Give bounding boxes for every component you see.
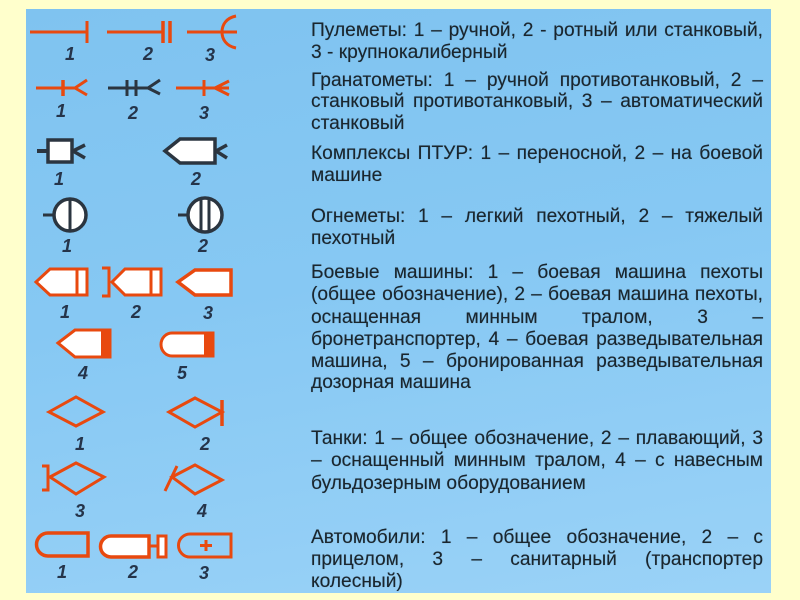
icon: combat vehicle 4: 4 [77, 363, 88, 383]
text: automobiles [310, 527, 763, 592]
icon: flamethrower light: 1 [62, 236, 72, 256]
icon: combat vehicle 1 [36, 269, 87, 322]
icon: machine gun 1 [30, 21, 87, 64]
icon: car 3: 3 [199, 563, 209, 583]
text: flamethrowers [311, 206, 763, 249]
icon: ATGM on vehicle [165, 139, 227, 189]
text: combat vehicles: (общее обозначение), 2 – боевая машина пехоты, [311, 284, 763, 305]
icon: ATGM portable: 1 [54, 169, 64, 189]
icon: combat vehicle 1: 1 [60, 302, 70, 322]
icon: machine gun 2: 2 [142, 44, 153, 64]
text: combat vehicles: дозорная машина [311, 372, 471, 393]
icon: car 2 [100, 536, 166, 582]
icon: tank 2 [169, 398, 222, 454]
icon: tank 4 [165, 465, 222, 521]
icon: grenade launcher 3 [176, 80, 229, 123]
icon: tank 3: 3 [75, 501, 85, 521]
icon: ATGM on vehicle: 2 [190, 169, 201, 189]
icon: grenade launcher 1: 1 [56, 101, 66, 121]
icon: grenade launcher 2: 2 [127, 103, 138, 123]
text: flamethrowers: пехотный [311, 228, 395, 249]
icon: ATGM portable [37, 140, 85, 189]
text: tanks: Танки: 1 – общее обозначение, 2 – плавающий, 3 [311, 428, 763, 449]
icon: flamethrower light [43, 199, 86, 256]
icon: flamethrower heavy [178, 198, 222, 256]
icon: combat vehicle 5: 5 [177, 363, 188, 383]
icon: flamethrower heavy: 2 [197, 236, 208, 256]
icon: tank 3 [42, 463, 104, 521]
text: tanks: – оснащенный минным тралом, 4 – с навесным [311, 450, 763, 471]
icon: machine gun 1: 1 [65, 44, 75, 64]
text: ATGM systems [311, 143, 763, 186]
icon: grenade launcher 1 [36, 80, 87, 121]
text: machine guns: Пулеметы: 1 – ручной, 2 - ротный или станковый, [311, 20, 763, 41]
text: combat vehicles [310, 262, 764, 393]
text: machine guns: 3 - крупнокалиберный [311, 42, 507, 63]
text: combat vehicles: оснащенная минным тралом, 3 – [311, 307, 763, 328]
icon: grenade launcher 3: 3 [199, 103, 209, 123]
icon: car 3 [179, 534, 231, 583]
icon: combat vehicle 2 [102, 268, 161, 322]
icon: car 2: 2 [127, 562, 138, 582]
text: automobiles: колесный) [311, 571, 403, 592]
icon: combat vehicle 3: 3 [203, 303, 213, 323]
icon: machine gun 3: 3 [205, 45, 215, 65]
text: combat vehicles: Боевые машины: 1 – боевая машина пехоты [311, 262, 763, 283]
icon: tank 1: 1 [75, 434, 85, 454]
text: tanks [310, 428, 763, 494]
text: ATGM systems: Комплексы ПТУР: 1 – переносной, 2 – на боевой [311, 143, 763, 164]
text: flamethrowers: Огнеметы: 1 – легкий пехотный, 2 – тяжелый [311, 206, 763, 227]
text: combat vehicles: машина, 5 – бронированная разведывательная [311, 351, 763, 372]
text: machine guns [311, 20, 763, 63]
icon: combat vehicle 5 [161, 332, 214, 383]
icon: machine gun 3 [187, 16, 237, 65]
text: grenade launchers: станковый [311, 113, 404, 134]
text: ATGM systems: машине [311, 165, 382, 186]
text: automobiles: Автомобили: 1 – общее обозначение, 2 – с [311, 527, 763, 548]
icon: combat vehicle 3 [178, 270, 231, 323]
icon: machine gun 2 [107, 21, 170, 64]
icon: grenade launcher 2 [108, 80, 160, 123]
text: automobiles: прицелом, 3 – санитарный (транспортер [311, 549, 763, 570]
icon: combat vehicle 4 [58, 330, 111, 383]
icon: tank 1 [49, 397, 103, 454]
icon: tank 4: 4 [196, 501, 207, 521]
icon: combat vehicle 2: 2 [130, 302, 141, 322]
text: grenade launchers: станковый противотанковый, 3 – автоматический [311, 91, 763, 112]
icon: car 1 [36, 533, 88, 582]
text: combat vehicles: бронетранспортер, 4 – боевая разведывательная [311, 329, 763, 350]
text: grenade launchers: Гранатометы: 1 – ручной противотанковый, 2 – [311, 70, 763, 91]
text: grenade launchers [311, 70, 764, 134]
icon: tank 2: 2 [199, 434, 210, 454]
text: tanks: бульдозерным оборудованием [311, 473, 586, 494]
icon: car 1: 1 [57, 562, 67, 582]
